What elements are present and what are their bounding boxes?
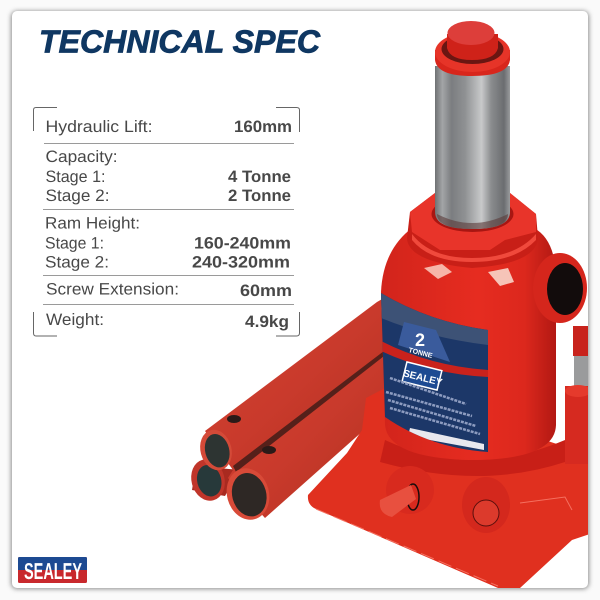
base bolts [380, 466, 510, 533]
product label [378, 290, 490, 455]
product image: bottle jack [187, 21, 591, 588]
hex nut [407, 193, 538, 268]
row: screw extension [46, 280, 292, 300]
row: weight: Weight: [46, 311, 104, 329]
row: ram height: 240-320mm [192, 254, 290, 272]
row: ram height: Ram Height: [45, 214, 140, 232]
logo [18, 557, 87, 584]
corner brackets [34, 108, 300, 336]
row: weight [46, 311, 289, 331]
row: screw extension: 60mm [240, 282, 292, 300]
steel ram [435, 66, 510, 229]
base plate [308, 388, 590, 588]
row: capacity: 2 Tonne [228, 187, 291, 205]
handle tubes [187, 298, 388, 525]
spec table [34, 108, 300, 336]
row: ram height: Stage 2: [45, 254, 109, 272]
logo: SEALEY [24, 558, 82, 584]
row: hydraulic lift: Hydraulic Lift: [46, 118, 152, 136]
row: capacity: Stage 2: [46, 187, 110, 205]
valve assembly [565, 326, 588, 464]
row: hydraulic lift [46, 118, 292, 136]
row: hydraulic lift: 160mm [234, 118, 292, 136]
row: weight: 4.9kg [245, 313, 289, 331]
row: capacity: 4 Tonne [228, 168, 291, 186]
row: ram height [45, 214, 291, 272]
row: capacity [46, 148, 291, 205]
row: screw extension: Screw Extension: [46, 280, 179, 298]
row: capacity: Capacity: [46, 148, 118, 166]
row: ram height: Stage 1: [45, 234, 104, 252]
product label: SEALEY [402, 368, 444, 389]
row: capacity: Stage 1: [46, 168, 106, 186]
ram collar and cap [435, 21, 510, 76]
row: ram height: 160-240mm [194, 234, 291, 252]
oil port [533, 253, 587, 323]
title: TECHNICAL SPEC [39, 24, 321, 60]
product label: TONNE [408, 347, 433, 360]
product label: 2 [415, 330, 425, 350]
jack body [381, 228, 556, 460]
